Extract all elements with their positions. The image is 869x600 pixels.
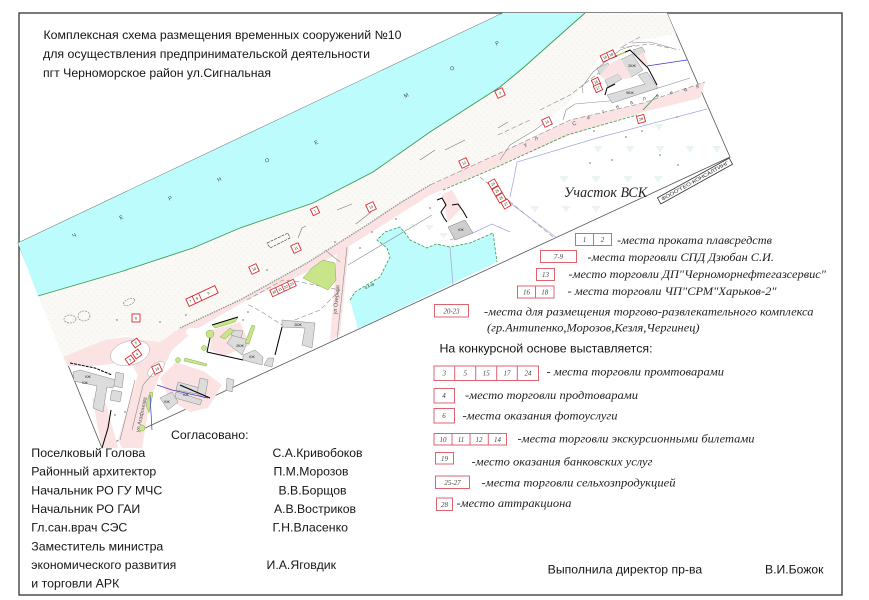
survey stamp	[657, 158, 733, 204]
street names: ул Агафонова	[135, 396, 149, 433]
legend row 13: -место торговли ДП"Черноморнефтегазсервис"	[568, 267, 827, 281]
markers 20 to 23	[270, 279, 296, 297]
legend row 10,11,12,14: 14	[494, 436, 502, 444]
sea name letters: Р	[168, 195, 174, 203]
legend row 1-2: 1	[583, 236, 586, 244]
sea name letters: Р	[495, 40, 501, 48]
trees and point symbols	[96, 116, 679, 416]
beach sketches	[64, 122, 508, 323]
author signature	[548, 562, 824, 576]
legend row 7-9: 7-9	[554, 253, 564, 261]
central-south buildings: КЖ	[249, 355, 255, 359]
sea name letters: О	[264, 157, 271, 165]
approver names: И.А.Яговдик	[266, 558, 337, 572]
sand beach	[38, 13, 676, 357]
approver names	[266, 446, 362, 572]
sea name letters	[72, 40, 501, 240]
approver positions: Заместитель министра	[31, 539, 164, 553]
legend row 10,11,12,14: 11	[458, 436, 464, 444]
markers 20 to 23: 21	[278, 287, 283, 292]
legend row 3,5,15,17,24: 3	[442, 370, 447, 378]
street names: 0,4 кВ	[364, 282, 375, 290]
approver positions: Районный архитектор	[31, 465, 157, 479]
lake	[350, 224, 510, 329]
marker 28	[636, 114, 646, 124]
legend row 19: 19	[441, 455, 448, 463]
markers 15 to 19: 17	[595, 86, 601, 91]
legend row 20-23	[434, 304, 814, 334]
markers 20 to 23: 23	[289, 282, 295, 287]
legend row 1-2: -места проката плавсредств	[617, 233, 772, 247]
map placement markers	[125, 50, 646, 374]
legend row 3,5,15,17,24: - места торговли промтоварами	[546, 364, 724, 378]
survey stamp: ФООО"ГЕО-КОНСАЛТИНГ	[661, 160, 730, 202]
legend row 28: -место аттракциона	[456, 496, 572, 510]
legend: competition places	[434, 364, 754, 510]
approver positions: Начальник РО ГАИ	[31, 502, 140, 516]
legend row 16,18: 16	[523, 288, 530, 296]
street names: н	[669, 90, 674, 96]
markers 3 to 6: 3	[128, 358, 132, 362]
approver positions	[31, 446, 176, 591]
approver names: В.В.Борщов	[278, 483, 346, 497]
street names: г	[601, 109, 606, 115]
markers 1, 2: 1	[313, 209, 317, 214]
central-south buildings	[202, 317, 315, 367]
sea name letters: Ч	[72, 232, 78, 240]
markers 24 to 27: 24	[490, 182, 496, 187]
markers 24 to 27	[488, 179, 511, 209]
approver names: Г.Н.Власенко	[272, 521, 348, 535]
legend row 1-2: 2	[601, 236, 605, 244]
markers 3 to 6: 4	[135, 352, 139, 356]
legend row 16,18: - места торговли ЧП"СРМ"Харьков-2"	[568, 284, 777, 298]
street names: С	[572, 121, 578, 128]
markers 15 to 19	[152, 50, 616, 374]
author signature: В.И.Божок	[765, 562, 824, 576]
street names: л	[534, 136, 539, 142]
legend row 6: -места оказания фотоуслуги	[462, 408, 618, 422]
approvals heading: Согласовано:	[171, 428, 248, 442]
markers 3 to 6	[125, 314, 142, 365]
markers 15 to 19: 19	[154, 367, 160, 372]
markers 24 to 27: 25	[494, 189, 500, 194]
sea name letters: Н	[217, 177, 223, 184]
street names: а	[683, 86, 689, 93]
markers 10 to 14: 11	[294, 246, 299, 251]
legend row 13: 13	[542, 271, 550, 279]
wetland symbols	[410, 125, 721, 238]
Black Sea	[18, 13, 585, 296]
sea name letters: О	[449, 65, 456, 73]
marker 28: 28	[639, 117, 644, 122]
south buildings near Agafonova street: КЖ	[82, 381, 88, 385]
road edges	[120, 37, 707, 440]
markers 3 to 6: 6	[135, 316, 137, 320]
markers 15 to 19: 16	[602, 55, 608, 60]
south buildings near Agafonova street: КЖ	[183, 393, 189, 397]
markers 15 to 19: 18	[609, 52, 614, 57]
sea name letters: М	[403, 92, 410, 100]
street names: л	[642, 96, 647, 102]
street names: ул Озерная	[332, 285, 342, 315]
north-east building cluster	[582, 45, 687, 103]
legend row 7-9: -места торговли СПД Дзюбан С.И.	[588, 250, 774, 264]
approver positions: экономического развития	[31, 558, 176, 572]
legend row 10,11,12,14: -места торговли экскурсионными билетами	[518, 432, 754, 446]
legend row 10,11,12,14: 10	[440, 436, 447, 444]
south buildings near Agafonova street: КЖ	[164, 400, 170, 404]
title: Комплексная схема размещения временных сооружений №10	[44, 28, 402, 42]
south buildings near Agafonova street: КЖ	[85, 375, 91, 379]
north-east building cluster: 5КЖ	[626, 91, 634, 95]
street names	[135, 84, 700, 433]
legend row 3,5,15,17,24: 17	[504, 370, 511, 378]
approver names: С.А.Кривобоков	[272, 446, 362, 460]
title: для осуществления предпринимательской деятельности	[43, 47, 370, 61]
street names: я	[695, 84, 700, 90]
legend row 3,5,15,17,24: 5	[463, 370, 467, 378]
legend row 6: 6	[442, 412, 446, 420]
approver positions: Гл.сан.врач СЭС	[31, 521, 128, 535]
legend row 3,5,15,17,24: 15	[483, 370, 490, 378]
markers 1, 2: 2	[498, 91, 502, 96]
street names: н	[615, 104, 620, 110]
markers 10 to 14: 12	[461, 161, 467, 166]
markers 24 to 27: 27	[503, 202, 509, 207]
legend row 19: -место оказания банковских услуг	[472, 454, 653, 468]
markers 24 to 27: 26	[498, 196, 504, 201]
map base	[18, 13, 730, 448]
approver positions: Начальник РО ГУ МЧС	[31, 483, 163, 497]
south buildings near Agafonova street	[70, 358, 234, 448]
title	[43, 28, 402, 80]
shoreline	[38, 13, 585, 296]
street names: ь	[655, 93, 660, 99]
approver names: П.М.Морозов	[274, 465, 348, 479]
sea name letters: Е	[119, 214, 125, 222]
title: пгт Черноморское район ул.Сигнальная	[43, 66, 271, 80]
markers 7 to 9: 7	[189, 299, 193, 304]
markers 10 to 14: 14	[544, 120, 550, 125]
markers 7 to 9: 8	[195, 296, 199, 301]
legend row 25-27: -места торговли сельхозпродукцией	[482, 476, 676, 490]
legend row 19	[436, 452, 653, 468]
legend row 20-23: 20-23	[443, 308, 460, 316]
legend row 16,18: 18	[541, 288, 549, 296]
street names: и	[586, 115, 591, 121]
markers 3 to 6: 5	[134, 341, 138, 345]
markers 20 to 23: 20	[272, 290, 277, 295]
approver positions: и торговли АРК	[31, 577, 119, 591]
markers 1, 2	[310, 88, 505, 216]
markers 10 to 14: 10	[251, 267, 257, 272]
markers 10 to 14: 13	[368, 205, 374, 210]
author signature: Выполнила директор пр-ва	[548, 562, 703, 576]
central lake building	[437, 198, 473, 240]
legend row 28: 28	[441, 501, 448, 509]
legend row 20-23: -места для размещения торгово-развлекательного комплекса	[484, 304, 814, 318]
pink road surfaces	[63, 82, 705, 448]
competition heading: На конкурсной основе выставляется:	[440, 342, 652, 356]
street names: а	[629, 99, 635, 106]
markers 15 to 19: 15	[593, 80, 599, 85]
north-east building cluster: 2КЖ	[628, 64, 636, 68]
sea name letters: Е	[314, 139, 320, 147]
central-south buildings: 2КЖ	[236, 344, 244, 348]
legend row 3,5,15,17,24: 24	[524, 370, 532, 378]
central lake building: КЖ	[458, 228, 464, 232]
green park	[303, 260, 336, 290]
legend row 3,5,15,17,24	[434, 364, 724, 380]
traffic islands	[108, 336, 152, 370]
site label: Участок ВСК	[564, 185, 648, 201]
street names: у	[523, 142, 528, 148]
legend row 10,11,12,14: 12	[476, 436, 483, 444]
site map	[18, 13, 733, 448]
legend row 25-27: 25-27	[444, 479, 461, 487]
markers 7 to 9	[186, 286, 218, 306]
legend row 20-23: (гр.Антипенко,Морозов,Кезля,Чергинец)	[487, 320, 700, 334]
approver names: А.В.Востриков	[274, 502, 356, 516]
approver positions: Поселковый Голова	[31, 446, 146, 460]
central-south buildings: 2КЖ	[294, 323, 302, 327]
markers 20 to 23: 22	[283, 284, 289, 290]
approvals block	[31, 428, 363, 591]
legend row 4: 4	[442, 392, 446, 400]
legend row 4: -место торговли продтоварами	[465, 388, 638, 402]
markers 7 to 9: 9	[207, 291, 210, 296]
legend: assigned places	[434, 233, 827, 334]
markers 10 to 14	[249, 117, 552, 274]
